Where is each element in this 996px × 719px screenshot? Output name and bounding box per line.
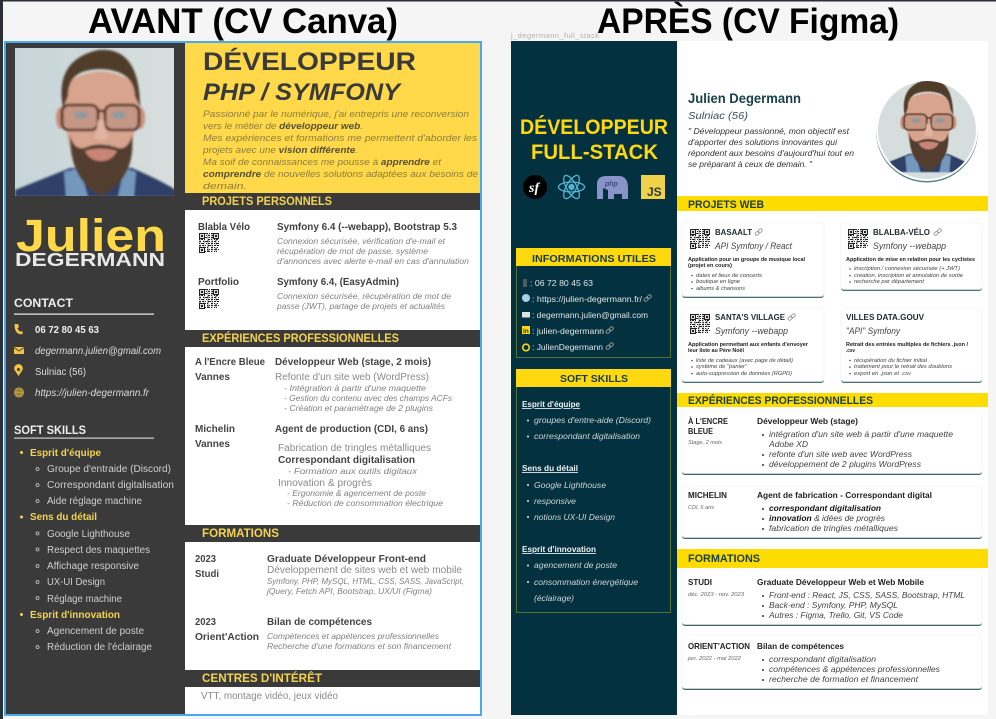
education titles: Orient'Action [195,632,259,643]
card: Villes Data.gouv: VILLES DATA.GOUV [846,312,924,322]
contact lines: : degermann.julien@gmail.com [532,310,648,320]
section bars [185,193,480,687]
icon: phone [14,324,23,334]
icon: symfony [523,175,547,199]
project descriptions: Connexion sécurisée, récupération de mot de [277,291,451,301]
card: Michelin: correspondant digitalisation [769,503,881,513]
card: Blalba-Vélo: recherche par département [854,279,925,285]
email: degermann.julien@gmail.com [35,346,161,357]
experience bullets [284,383,453,508]
name and intro [688,91,854,169]
quote [688,126,854,169]
quote: répondent aux besoins d'aujourd'hui tout en [688,148,854,158]
card: Studi: Autres : Figma, Trello, Git, VS Code [768,610,903,620]
card: À l'Encre Bleue: BLEUE [688,426,713,436]
phone number: 06 72 80 45 63 [35,325,99,336]
section: contact [14,298,161,399]
section: education [195,554,464,651]
QR code: Portfolio [199,289,219,309]
icon: javascript [641,175,665,199]
experience details: Refonte d'un site web (WordPress) [275,372,429,383]
project titles: Symfony 6.4 (--webapp), Bootstrap 5.3 [277,222,457,233]
sidebar background [6,43,185,714]
card: À l'Encre Bleue: refonte d'un site web avec WordPress [769,449,912,459]
contact lines: : 06 72 80 45 63 [530,278,593,288]
yellow header background [185,43,480,193]
website: https://julien-degermann.fr [35,388,150,399]
card: Michelin: MICHELIN [688,490,727,500]
card: Santa's Village: auto-suppression de données (RGPD) [696,371,792,377]
name: Julien Degermann [688,91,801,106]
card: Santa's Village: SANTA'S VILLAGE [715,312,785,322]
text: introduction: projets avec une vision différente . [202,145,358,156]
card: Santa's Village: système de "panier" [696,364,748,370]
skill group titles: Sens du détail [522,463,578,473]
experience titles: Développeur Web (stage, 2 mois) [275,357,431,368]
skill groups: Esprit d'équipe [30,448,101,459]
card: Studi: Graduate Développeur Web et Web Mobile [757,577,924,587]
teal sidebar [511,41,677,715]
card: Studi: déc. 2023 - nov. 2023 [688,592,745,598]
card: Michelin [688,490,932,533]
card: Villes Data.gouv: traitement pour le retrait des doublons [854,364,952,370]
icon: mail [522,312,530,318]
card: Basaalt: albums & chansons [696,286,745,292]
card: Basaalt: API Symfony / React [714,241,792,251]
icon: location pin [14,364,23,376]
experience titles: Correspondant digitalisation [278,455,415,466]
experience titles: Michelin [195,424,235,435]
icon: linkedin [522,326,530,335]
project descriptions [276,236,469,311]
item bullets [36,468,39,648]
project titles: Portfolio [198,277,239,288]
text: interests: VTT, montage vidéo, jeux vidéo [201,691,338,702]
quote: se préparant à ceux de demain. " [688,159,813,169]
card: Orient'Action [687,641,940,684]
card: Villes Data.gouv: .csv [846,348,855,354]
link icons [606,294,652,350]
text: introduction: vers le métier de développeur web . [203,121,363,132]
card: Basaalt: boutique en ligne [696,279,740,285]
text: introduction: Ma soif de connaissances me pousse à apprendre et [203,157,441,168]
card: Santa's Village: Symfony --webapp [715,326,788,336]
skill items: (éclairage) [534,593,574,603]
text: introduction [202,109,478,192]
project titles [198,222,457,288]
skill items: correspondant digitalisation [534,431,640,441]
text: introduction: Passionné par le numérique, j'ai entrepris une reconversion [203,109,469,120]
card: Michelin: fabrication de tringles métalliques [769,523,898,533]
card: Orient'Action: Bilan de compétences [757,641,844,651]
project descriptions: d'annonces avec alerte e-mail en cas d'annulation [277,256,469,266]
item bullets [527,420,529,583]
card: Blalba-Vélo [846,227,975,285]
heading: soft skills: SOFT SKILLS [14,425,86,437]
icon: php elephant [597,176,628,199]
card: À l'Encre Bleue: À L'ENCRE [688,416,728,426]
section headings: EXPÉRIENCES PROFESSIONNELLES [202,332,399,345]
card: Santa's Village: leur liste au Père Noël [688,348,744,354]
card: Blalba-Vélo: inscription / connexion sécurisée (+ JWT) [854,266,960,272]
icon: globe [14,388,24,397]
card: Studi: STUDI [688,577,712,587]
experience titles [195,357,431,466]
section headings: FORMATIONS [688,553,760,565]
section headings: CENTRES D'INTÉRÊT [202,672,322,685]
education titles [195,554,426,643]
skill items: groupes d'entre-aide (Discord) [534,415,651,425]
skill group titles: Esprit d'équipe [522,399,580,409]
skill items: Google Lighthouse [47,529,130,540]
section headings: PROJETS PERSONNELS [202,196,332,208]
title: avant: AVANT (CV Canva) [88,2,398,41]
card: Basaalt: (projet en cours) [688,263,732,269]
experience bullets: - Création et paramétrage de 2 plugins [284,403,434,413]
card: À l'Encre Bleue [688,416,953,469]
project descriptions: passe (JWT), partage de projets et actualités [276,301,446,311]
heading: full-stack title [520,116,668,164]
skill items [47,464,174,653]
skill items: agencement de poste [534,560,617,570]
card: Studi: Back-end : Symfony, PHP, MySQL [769,600,898,610]
box border [516,248,670,358]
contact lines [530,278,648,352]
section headings [688,199,873,565]
heading: full-stack title: FULL-STACK [531,141,658,164]
section: soft skills [14,425,174,653]
quote: " Développeur passionné, mon objectif est [688,126,850,136]
skill items: UX-UI Design [47,577,105,588]
box border [516,370,670,612]
card: Blalba-Vélo: BLALBA-VÉLO [873,227,930,237]
card: Studi: Front-end : React, JS, CSS, SASS, Bootstrap, HTML [769,590,965,600]
box: soft skills [516,369,671,612]
icon: website [522,294,530,302]
education details: Recherche d'une formations et son financement [267,641,452,651]
experience bullets: - Réduction de consommation électrique [287,498,443,508]
section: personal projects [198,222,469,311]
skill items: consommation énergétique [534,577,638,587]
icon: react [558,173,584,201]
experience bullets: - Intégration à partir d'une maquette [284,383,426,393]
icon: javascript: JS [647,185,662,199]
education subtitle: Développement de sites web et web mobile [267,565,462,576]
skill items: notions UX-UI Design [534,512,615,522]
experience titles: Vannes [195,439,230,450]
icon: phone [523,279,527,287]
education titles: Studi [195,569,219,580]
icon: github [523,344,529,351]
location: Sulniac (56) [688,110,748,122]
CV frame [5,42,481,715]
skill items: responsive [534,496,576,506]
skill items: Respect des maquettes [47,545,150,556]
skill items: Aide réglage machine [47,496,142,507]
card: Villes Data.gouv: récupération du fichier initial [854,358,928,364]
icon: php elephant: php [604,181,619,188]
icon: linkedin: in [523,328,529,335]
text: introduction: Mes expériences et formations me permettent d'aborder les [203,133,477,144]
section headings [202,196,399,685]
box header [516,369,671,387]
education titles: Graduate Développeur Front-end [267,554,426,565]
card: Villes Data.gouv [846,312,969,377]
card: Blalba-Vélo: Symfony --webapp [873,241,946,251]
card: Blalba-Vélo: création, inscription et annulation de sortie [854,273,963,279]
card: Santa's Village: liste de cadeaux (avec page de détail) [696,358,793,364]
skill groups: Sens du détail [30,512,97,523]
text: introduction: demain. [203,181,247,192]
experience bullets: - Formation aux outils digitaux [288,466,418,476]
box header [516,248,671,266]
card: Santa's Village: Application permettant aux enfants d'envoyer [688,342,809,348]
contact lines: : JulienDegermann [532,342,603,352]
white page [677,41,988,715]
card: Basaalt [688,227,806,292]
title: après: APRÈS (CV Figma) [597,1,899,41]
project descriptions: récupération de mot de passe, système [277,246,428,256]
box heading: INFORMATIONS UTILES [532,253,656,265]
location: Sulniac (56) [35,367,86,378]
skill group titles: Esprit d'innovation [522,544,596,554]
skill groups [20,448,120,621]
experience titles: Vannes [195,372,230,383]
heading: job title [203,47,416,106]
education titles: 2023 [195,554,216,565]
skill items: Groupe d'entraide (Discord) [47,464,171,475]
skill items: Réduction de l'éclairage [47,642,152,653]
experience bullets: - Gestion du contenu avec des champs ACFs [284,393,453,403]
card: À l'Encre Bleue: Stage, 2 mois [688,440,722,446]
experience details: Fabrication de tringles métalliques [278,443,431,454]
card: Basaalt: dates et lieux de concerts [696,273,762,279]
card: Orient'Action: jan. 2022 - mai 2022 [687,656,741,662]
experience titles: A l'Encre Bleue [195,357,265,368]
section: experience [195,357,453,508]
card: Basaalt: Application pour un groupe de musique local [688,257,806,263]
photo [15,48,176,197]
education titles: 2023 [195,617,216,628]
skill items: Affichage responsive [47,561,139,572]
skill items: Réglage machine [47,594,122,605]
heading: contact: CONTACT [14,298,73,310]
heading: job title: DÉVELOPPEUR [203,47,416,76]
education details: Compétences et appétences professionnelles [267,631,440,641]
card: Basaalt: BASAALT [715,227,753,237]
panel: CV Canva [5,42,481,715]
quote: d'apporter des solutions innovantes qui [688,137,838,147]
skill group titles [522,399,596,554]
card: Villes Data.gouv: export en .json et .csv [854,371,911,377]
card: Studi [688,577,965,620]
card: Michelin: innovation & idées de progrès [769,513,885,523]
contact lines: : julien-degermann [532,326,604,336]
box heading: SOFT SKILLS [560,373,628,385]
card: Villes Data.gouv: Retrait des entrées multiples de fichiers .json / [846,342,969,348]
experience details: Innovation & progrès [278,478,372,489]
project titles: Blabla Vélo [198,222,250,233]
card: À l'Encre Bleue: intégration d'un site web à partir d'une maquette [769,429,953,439]
card: Villes Data.gouv: "API" Symfony [846,326,900,336]
experience bullets: - Ergonomie & agencement de poste [287,488,426,498]
section headings: FORMATIONS [202,528,279,540]
card: À l'Encre Bleue: Développeur Web (stage) [757,416,858,426]
card: Orient'Action: recherche de formation et financement [769,674,919,684]
card: Santa's Village [688,312,809,377]
project titles: Symfony 6.4, (EasyAdmin) [277,277,399,288]
project descriptions: Connexion sécurisée, vérification d'e-mail et [277,236,446,246]
heading: full-stack title: DÉVELOPPEUR [520,116,668,139]
box: useful info [516,248,671,358]
card: À l'Encre Bleue: Adobe XD [768,439,808,449]
card: Orient'Action: correspondant digitalisation [769,654,876,664]
education details: jQuery, Fetch API, Bootstrap, UX/UI (Figma) [266,586,432,596]
card: Michelin: CDI, 6 ans [688,505,714,511]
section headings: EXPÉRIENCES PROFESSIONNELLES [688,394,873,407]
education details: Symfony, PHP, MySQL, HTML, CSS, SASS, JavaScript, [267,576,464,586]
section bars [677,196,988,568]
figma frame label: j_degermann_full_stack [510,31,599,40]
text: introduction: comprendre de nouvelles solutions adaptées aux besoins de [203,169,478,180]
card: Orient'Action: ORIENT'ACTION [688,641,750,651]
card: Michelin: Agent de fabrication - Correspondant digital [757,490,932,500]
education details [266,576,464,651]
skill items: Google Lighthouse [534,480,606,490]
card: À l'Encre Bleue: développement de 2 plugins WordPress [769,459,921,469]
round photo [874,79,979,182]
card: Orient'Action: compétences & appétences professionnelles [769,664,940,674]
panel: CV Figma [511,41,988,715]
sidebar name: DEGERMANN [15,250,165,270]
heading: job title: PHP / SYMFONY [203,79,402,106]
cards background [682,223,982,690]
skill items [534,415,651,603]
experience titles: Agent de production (CDI, 6 ans) [275,424,428,435]
sidebar name: Julien [16,210,166,261]
skill groups: Esprit d'innovation [30,610,120,621]
education titles: Bilan de compétences [267,617,372,628]
skill items: Agencement de poste [47,626,144,637]
contact lines: : https://julien-degermann.fr/ [532,294,643,304]
card: Blalba-Vélo: Application de mise en relation pour les cyclistes [846,257,975,263]
QR code: Blabla Vélo [199,233,219,253]
section headings: PROJETS WEB [688,199,764,211]
icon: symfony: sf [528,181,540,196]
experience details [275,372,431,489]
icon: mail [14,347,24,354]
skill items: Correspondant digitalisation [47,480,174,491]
